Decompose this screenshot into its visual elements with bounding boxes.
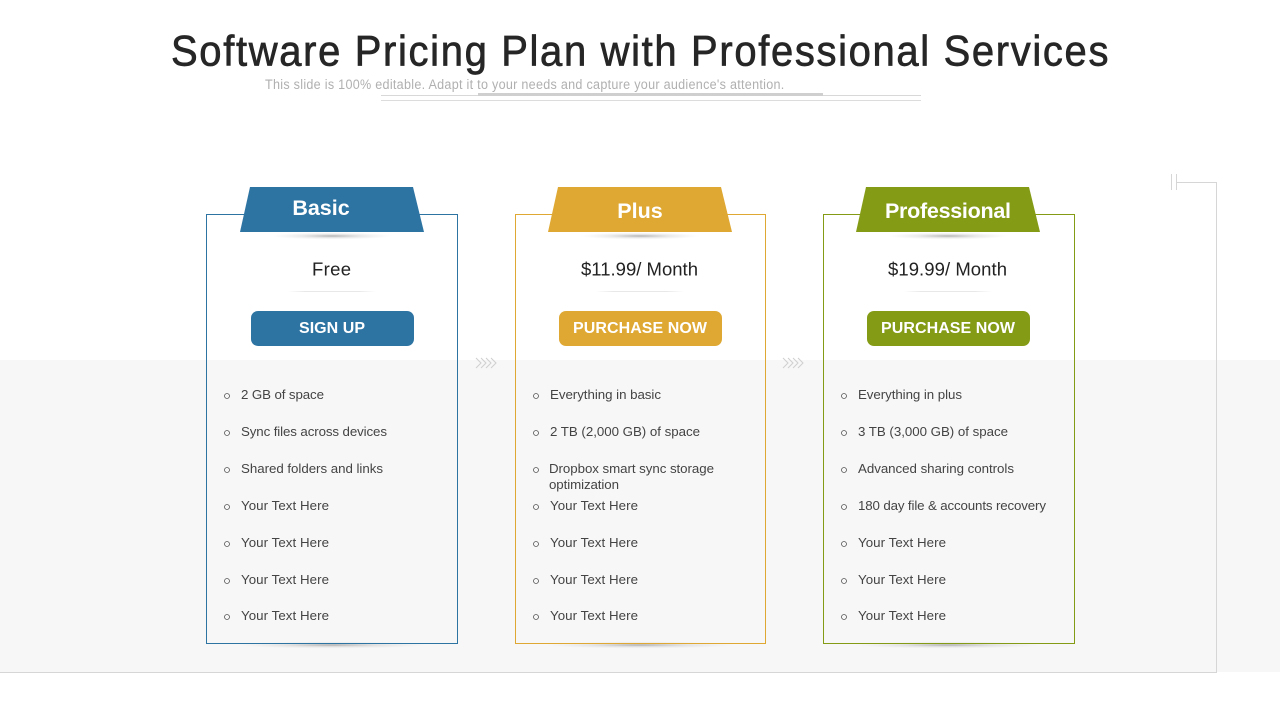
feature list: 2 GB of space bbox=[241, 387, 324, 402]
arrow: plus to professional bbox=[783, 358, 803, 368]
feature list: Your Text Here bbox=[241, 535, 329, 550]
feature list: Everything in basic bbox=[550, 387, 661, 402]
tab label: Plus bbox=[617, 199, 663, 223]
feature list bbox=[842, 387, 1046, 623]
feature list: 180 day file & accounts recovery bbox=[858, 498, 1046, 513]
tab bbox=[240, 187, 424, 232]
feature list: Your Text Here bbox=[241, 572, 329, 587]
title: Software Pricing Plan with Professional Services bbox=[171, 26, 1108, 75]
card shadow bbox=[545, 642, 735, 648]
card border bbox=[824, 214, 1074, 644]
tab bbox=[856, 187, 1040, 232]
feature list: Dropbox smart sync storage bbox=[549, 461, 714, 476]
feature list: Advanced sharing controls bbox=[858, 461, 1014, 476]
feature list: Sync files across devices bbox=[241, 424, 387, 439]
tab shadow bbox=[580, 232, 700, 240]
tab bbox=[548, 187, 732, 232]
tab shadow bbox=[888, 232, 1008, 240]
price: Free bbox=[312, 258, 351, 280]
background band bbox=[0, 360, 1280, 672]
button bbox=[251, 311, 414, 346]
panel: Plus plan bbox=[516, 187, 766, 648]
card border bbox=[516, 214, 766, 644]
feature list: Your Text Here bbox=[550, 535, 638, 550]
price divider bbox=[904, 291, 992, 292]
card shadow bbox=[237, 642, 427, 648]
feature list: 3 TB (3,000 GB) of space bbox=[858, 424, 1008, 439]
feature list: Shared folders and links bbox=[241, 461, 383, 476]
feature list bbox=[534, 387, 714, 623]
button label: PURCHASE NOW bbox=[573, 320, 708, 337]
button bbox=[559, 311, 722, 346]
feature list: Your Text Here bbox=[550, 608, 638, 623]
panel: Professional plan bbox=[824, 187, 1074, 648]
arrow: basic to plus bbox=[476, 358, 496, 368]
feature list: Your Text Here bbox=[241, 498, 329, 513]
button label: PURCHASE NOW bbox=[881, 320, 1016, 337]
price divider bbox=[596, 291, 684, 292]
feature list: optimization bbox=[549, 477, 619, 492]
decorative frame line bbox=[0, 174, 1216, 672]
feature list: 2 TB (2,000 GB) of space bbox=[550, 424, 700, 439]
price: $19.99/ Month bbox=[888, 258, 1007, 280]
tab label: Basic bbox=[292, 196, 350, 220]
tab label: Professional bbox=[885, 199, 1011, 223]
panel: Basic plan bbox=[206, 187, 458, 648]
feature list: Your Text Here bbox=[858, 608, 946, 623]
card shadow bbox=[853, 642, 1043, 648]
price divider bbox=[288, 291, 376, 292]
subtitle: This slide is 100% editable. Adapt it to your needs and capture your audience's attention. bbox=[265, 76, 784, 92]
feature list: Your Text Here bbox=[858, 535, 946, 550]
button bbox=[867, 311, 1030, 346]
feature list: Your Text Here bbox=[550, 572, 638, 587]
card border bbox=[206, 214, 458, 644]
feature list bbox=[224, 387, 387, 623]
feature list: Everything in plus bbox=[858, 387, 962, 402]
feature list: Your Text Here bbox=[550, 498, 638, 513]
feature list: Your Text Here bbox=[858, 572, 946, 587]
subtitle underline bbox=[381, 93, 921, 101]
button label: SIGN UP bbox=[299, 320, 365, 337]
feature list: Your Text Here bbox=[241, 608, 329, 623]
price: $11.99/ Month bbox=[581, 258, 698, 280]
tab shadow bbox=[272, 232, 392, 240]
